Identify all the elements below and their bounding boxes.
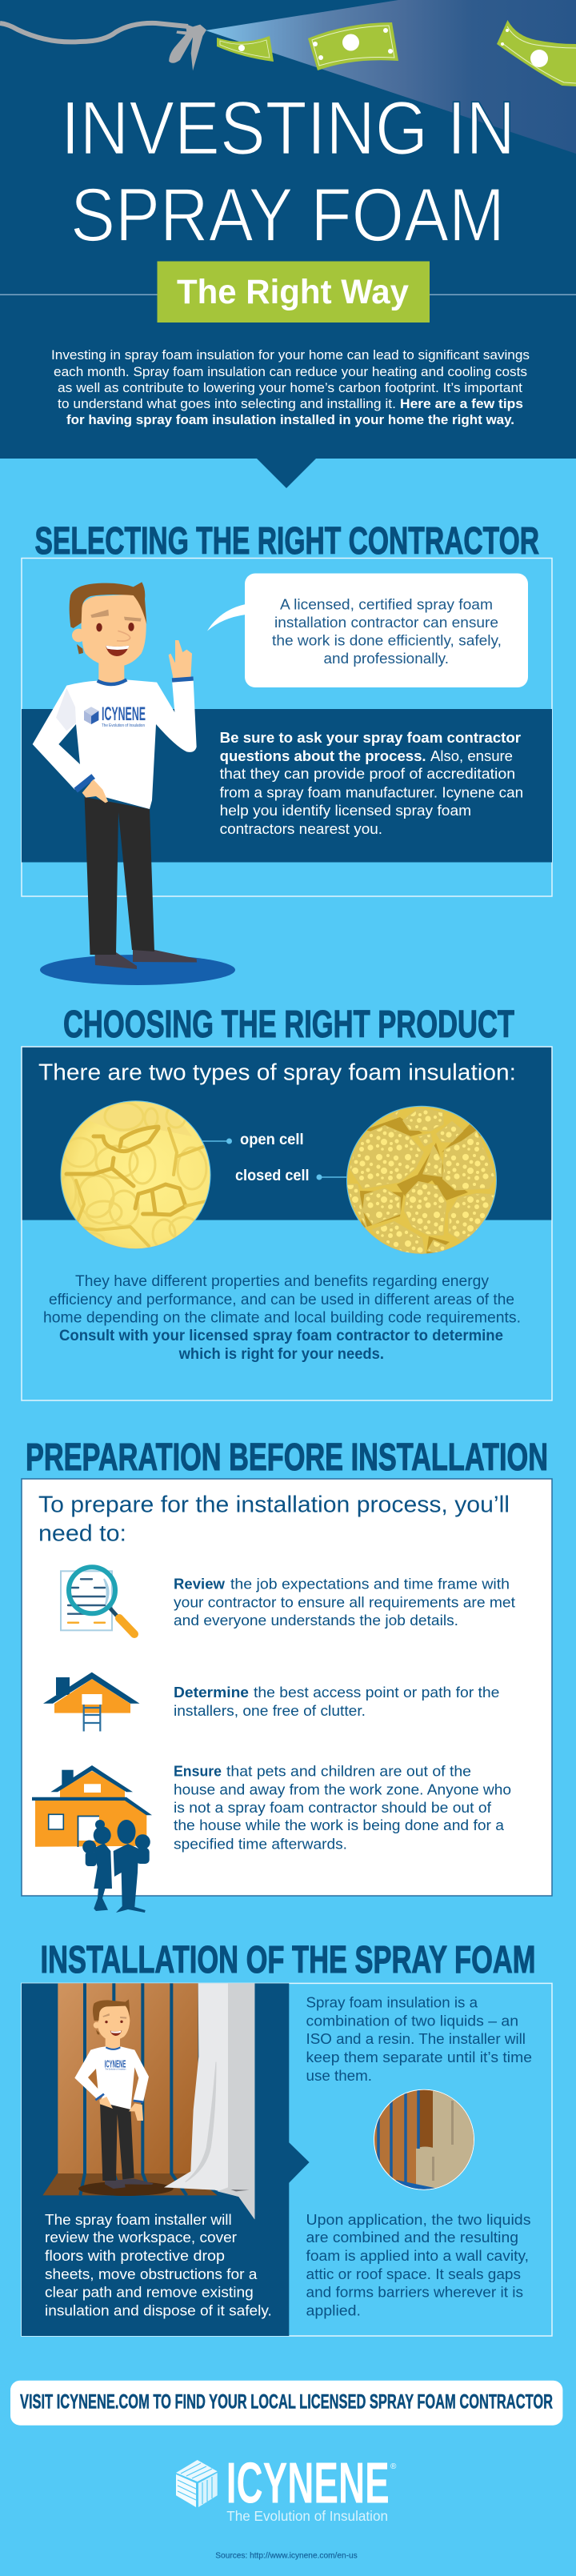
- installer: ICYNENE: [105, 2058, 126, 2069]
- foam sample: closed cell: [344, 1103, 500, 1260]
- panel: selecting contractor: [22, 559, 552, 985]
- panel heading: [38, 1492, 510, 1546]
- icon: spray gun and hose: [0, 23, 206, 70]
- intro text: as well as contribute to lowering your home’s carbon footprint. It’s important: [58, 381, 522, 395]
- band text: Also, ensure: [430, 748, 513, 764]
- subtitle badge: [157, 261, 430, 323]
- speech bubble: A licensed, certified spray foam: [280, 596, 493, 613]
- character: contractor: The Evolution of Insulation: [102, 723, 145, 728]
- speech bubble: and professionally.: [323, 650, 449, 667]
- text: two liquids: keep them separate until it’s time: [306, 2049, 532, 2065]
- text: installer workspace: floors with protective drop: [45, 2248, 225, 2264]
- installer: [74, 1999, 154, 2189]
- panel heading: There are two types of spray foam insulation:: [38, 1060, 516, 1086]
- logo: Icynene: ICYNENE: [226, 2450, 390, 2515]
- drop sheet: [164, 1983, 254, 2219]
- trousers: [85, 797, 154, 955]
- body text: which is right for your needs.: [178, 1346, 384, 1363]
- text: ensure: the house while the work is being done and for a: [174, 1817, 505, 1833]
- text: review: Review: [174, 1576, 226, 1592]
- text: application: Upon application, the two liquids: [306, 2212, 531, 2228]
- illustration: foam in wall cavity: [374, 2089, 477, 2193]
- speech bubble: the work is done efficiently, safely,: [272, 632, 502, 648]
- text: determine: the best access point or path for the: [254, 1685, 499, 1701]
- text: application: attic or roof space. It seals gaps: [306, 2266, 521, 2282]
- speech bubble: installation contractor can ensure: [274, 614, 498, 631]
- label: open cell: [202, 1132, 304, 1148]
- text: installer workspace: review the workspace, cover: [45, 2229, 237, 2245]
- icon: striped cube: [176, 2460, 218, 2507]
- text: two liquids: combination of two liquids – an: [306, 2013, 518, 2029]
- text: ensure: Ensure: [174, 1764, 222, 1780]
- body text: home depending on the climate and local building code requirements.: [43, 1309, 521, 1327]
- installer: The Evolution of Insulation: [105, 2068, 126, 2071]
- panel heading: To prepare for the installation process, you’ll: [38, 1492, 510, 1517]
- text: application: applied.: [306, 2303, 361, 2319]
- text: installer workspace: insulation and dispose of it safely.: [45, 2303, 272, 2319]
- band text: that they can provide proof of accreditation: [220, 766, 515, 782]
- body text: Consult with your licensed spray foam contractor to determine: [59, 1328, 503, 1344]
- subtitle badge: The Right Way: [177, 273, 409, 311]
- panel heading: need to:: [38, 1520, 126, 1546]
- neck and face: [98, 659, 124, 686]
- band text: Be sure to ask your spray foam contractor: [220, 730, 521, 746]
- icon: house with ladder: [43, 1673, 139, 1732]
- text: review: your contractor to ensure all requirements are met: [174, 1594, 515, 1610]
- title: SPRAY FOAM: [70, 173, 505, 258]
- text: installer workspace: sheets, move obstructions for a: [45, 2266, 258, 2282]
- intro text: to understand what goes into selecting and installing it.: [58, 397, 396, 411]
- text: ensure: house and away from the work zone. Anyone who: [174, 1782, 511, 1798]
- text: two liquids: [306, 1995, 532, 2084]
- text: installer workspace: The spray foam installer will: [45, 2212, 232, 2228]
- body text: They have different properties and benefits regarding energy: [75, 1273, 490, 1290]
- text: application: [306, 2212, 531, 2319]
- text: two liquids: ISO and a resin. The installer will: [306, 2031, 526, 2047]
- hero header panel: [0, 0, 576, 488]
- band text: [220, 730, 523, 837]
- spray beam: [206, 0, 576, 154]
- intro text: Here are a few tips: [400, 397, 523, 411]
- shirt logo: [84, 707, 98, 724]
- label: closed cell: closed cell: [235, 1168, 309, 1184]
- text: ensure: that pets and children are out of the: [226, 1764, 471, 1780]
- text: ensure: is not a spray foam contractor should be out of: [174, 1800, 492, 1816]
- icon: flying bill large: [497, 20, 576, 86]
- text: determine: installers, one free of clutter.: [174, 1703, 366, 1719]
- text: determine: Determine: [174, 1685, 249, 1701]
- panel: installation: [22, 1983, 552, 2336]
- label: open cell: open cell: [240, 1132, 304, 1148]
- text: ensure: specified time afterwards.: [174, 1837, 347, 1853]
- band text: questions about the process.: [220, 748, 426, 764]
- text: ensure: [174, 1764, 511, 1853]
- text: review: and everyone understands the job details.: [174, 1613, 458, 1629]
- character: contractor: ICYNENE: [102, 703, 146, 725]
- panel: choosing product: [22, 1047, 552, 1400]
- text: installer workspace: clear path and remove existing: [45, 2285, 254, 2301]
- band text: help you identify licensed spray foam: [220, 803, 471, 819]
- band text: contractors nearest you.: [220, 821, 382, 837]
- text: application: and forms barriers wherever it is: [306, 2285, 523, 2301]
- icon: document and magnifier: [61, 1567, 134, 1634]
- text: determine: [174, 1685, 499, 1719]
- text: review: [174, 1576, 515, 1629]
- text: application: are combined and the resulting: [306, 2229, 518, 2245]
- title: [61, 86, 515, 258]
- sources: Sources: http://www.icynene.com/en-us: [215, 2552, 358, 2561]
- text: review: the job expectations and time frame with: [230, 1576, 510, 1592]
- character: contractor: [33, 582, 235, 985]
- body text: efficiency and performance, and can be used in different areas of the: [49, 1292, 514, 1308]
- icon: house with family: [32, 1765, 152, 1913]
- icon: flying bill medium: [308, 22, 398, 70]
- body text: [43, 1273, 521, 1363]
- intro text: [51, 348, 530, 427]
- foam sample: open cell: [61, 1100, 211, 1249]
- text: application: foam is applied into a wall cavity,: [306, 2248, 529, 2264]
- panel: preparation: [22, 1479, 552, 1913]
- divider line: [0, 294, 576, 295]
- text: two liquids: use them.: [306, 2068, 372, 2084]
- raised hand: [169, 640, 192, 679]
- text: two liquids: Spray foam insulation is a: [306, 1995, 478, 2011]
- intro text: Investing in spray foam insulation for your home can lead to significant savings: [51, 348, 530, 363]
- icon: flying bill small: [217, 36, 274, 62]
- label: closed cell: [235, 1168, 346, 1184]
- intro text: each month. Spray foam insulation can reduce your heating and cooling costs: [54, 365, 527, 379]
- shoes: [94, 948, 197, 969]
- band text: from a spray foam manufacturer. Icynene can: [220, 785, 523, 801]
- intro text: for having spray foam insulation installed in your home the right way.: [66, 413, 514, 427]
- text: installer workspace: [45, 2212, 272, 2319]
- logo: Icynene: The Evolution of Insulation: [226, 2508, 388, 2524]
- logo: Icynene: [176, 2450, 397, 2524]
- shirt: [33, 679, 197, 809]
- logo: Icynene: ®: [390, 2462, 397, 2471]
- illustration: wall, drop sheet and installer: [42, 1983, 254, 2219]
- hand on hip: [82, 779, 108, 803]
- family silhouette: [82, 1820, 150, 1913]
- call to action banner: [10, 2381, 562, 2426]
- speech bubble: [207, 573, 528, 687]
- title: INVESTING IN: [61, 86, 515, 171]
